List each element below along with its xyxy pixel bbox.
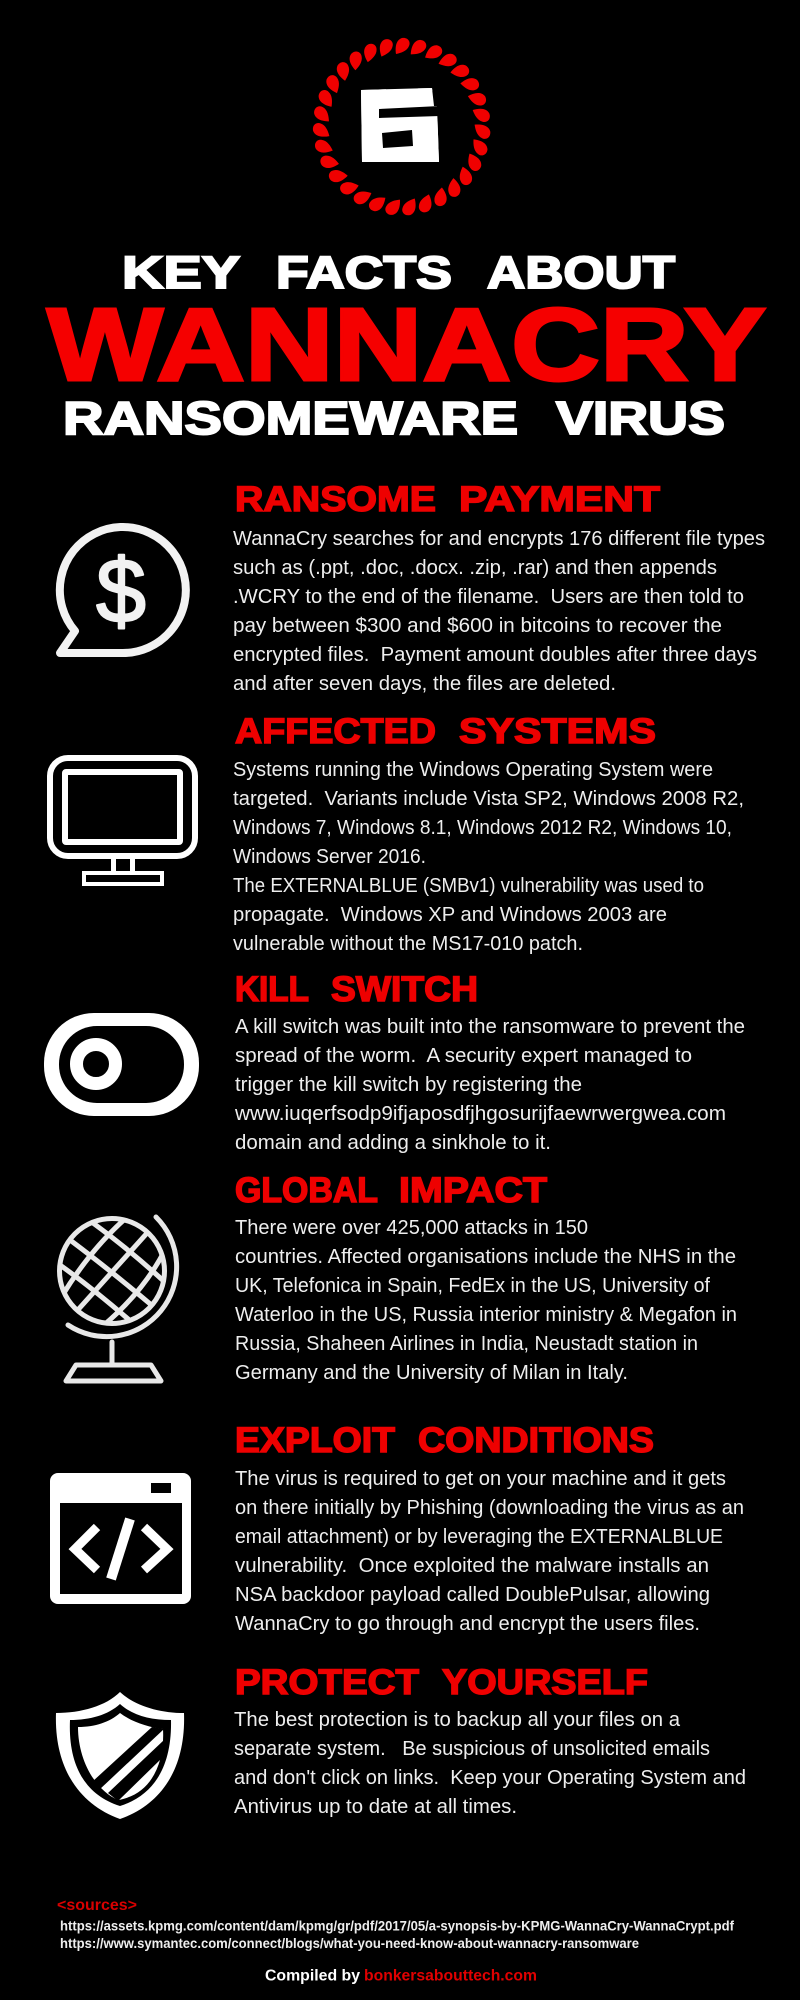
text: protect yourself body: The best protection is to backup all your files on a xyxy=(234,1709,681,1731)
text: global impact body: UK, Telefonica in Spain, FedEx in the US, University of xyxy=(235,1275,710,1297)
icon: monitor xyxy=(50,758,195,884)
text: ransome payment body xyxy=(233,528,765,695)
text: global impact body: Germany and the University of Milan in Italy. xyxy=(235,1362,628,1384)
credit line xyxy=(265,1968,537,1984)
text: ransome payment body: encrypted files. Payment amount doubles after three days xyxy=(233,644,757,666)
heading: exploit conditions: EXPLOIT xyxy=(235,1421,395,1460)
number 6: 6 xyxy=(345,17,456,240)
heading: protect yourself: PROTECT xyxy=(235,1663,419,1702)
sources xyxy=(57,1897,734,1951)
badge: number 6 in red ring xyxy=(312,38,490,216)
heading: kill switch xyxy=(235,970,478,1009)
text: ransome payment body: and after seven days, the files are deleted. xyxy=(233,673,616,695)
text: exploit conditions body: email attachment) or by leveraging the EXTERNALBLUE xyxy=(235,1526,723,1548)
heading: ransome payment: PAYMENT xyxy=(459,480,660,519)
text: exploit conditions body: NSA backdoor payload called DoublePulsar, allowing xyxy=(235,1584,710,1606)
text: protect yourself body: separate system. Be suspicious of unsolicited emails xyxy=(234,1738,710,1760)
title line: WannaCry: WANNACRY xyxy=(47,287,766,402)
icon: dollar speech bubble: $ xyxy=(96,541,146,642)
text: affected systems body: Windows Server 2016. xyxy=(233,846,426,868)
icon: desk globe xyxy=(60,1217,177,1381)
heading: kill switch: SWITCH xyxy=(331,970,478,1009)
heading: global impact: GLOBAL xyxy=(235,1171,378,1210)
heading: protect yourself: YOURSELF xyxy=(442,1663,648,1702)
panel: exploit conditions xyxy=(50,1421,744,1635)
heading: kill switch: KILL xyxy=(235,970,309,1009)
icon: toggle switch xyxy=(44,1013,199,1116)
heading: exploit conditions xyxy=(235,1421,654,1460)
text: exploit conditions body: The virus is required to get on your machine and it gets xyxy=(235,1468,726,1490)
panel: kill switch xyxy=(44,970,745,1154)
icon: code window xyxy=(50,1473,191,1604)
text: kill switch body: www.iuqerfsodp9ifjaposdfjhgosurijfaewrwergwea.com xyxy=(234,1103,726,1125)
number 6 xyxy=(361,88,439,162)
heading: affected systems: AFFECTED xyxy=(235,712,436,751)
text: affected systems body: Windows 7, Windows 8.1, Windows 2012 R2, Windows 10, xyxy=(233,817,732,839)
heading: affected systems xyxy=(235,712,656,751)
heading: protect yourself xyxy=(235,1663,648,1702)
icon: dollar speech bubble xyxy=(60,527,186,653)
title line: key facts about: ABOUT xyxy=(487,247,675,298)
text: global impact body: Waterloo in the US, Russia interior ministry & Megafon in xyxy=(235,1304,737,1326)
text: kill switch body: trigger the kill switch by registering the xyxy=(235,1074,582,1096)
text: ransome payment body: WannaCry searches for and encrypts 176 different file types xyxy=(233,528,765,550)
text: global impact body: countries. Affected organisations include the NHS in the xyxy=(235,1246,736,1268)
title line: key facts about xyxy=(122,247,675,298)
title xyxy=(47,247,766,444)
red droplet ring xyxy=(313,38,491,216)
text: protect yourself body: Antivirus up to date at all times. xyxy=(234,1796,517,1818)
heading: global impact: IMPACT xyxy=(399,1171,547,1210)
title line: ransomeware virus xyxy=(63,392,725,444)
panel: ransome payment xyxy=(60,480,765,695)
sources label: <sources> xyxy=(57,1897,137,1914)
heading: affected systems: SYSTEMS xyxy=(459,712,656,751)
heading: ransome payment: RANSOME xyxy=(235,480,436,519)
text: exploit conditions body xyxy=(235,1468,744,1635)
panel: global impact xyxy=(60,1171,737,1384)
text: affected systems body: propagate. Windows XP and Windows 2003 are xyxy=(233,904,667,926)
title line: key facts about: FACTS xyxy=(276,247,452,298)
text: exploit conditions body: WannaCry to go through and encrypt the users files. xyxy=(235,1613,700,1635)
panel: affected systems xyxy=(50,712,744,955)
text: ransome payment body: pay between $300 and $600 in bitcoins to recover the xyxy=(233,615,722,637)
panel: protect yourself xyxy=(56,1663,746,1819)
credit line: Compiled by xyxy=(265,1968,360,1984)
text: affected systems body: targeted. Variants include Vista SP2, Windows 2008 R2, xyxy=(233,788,744,810)
title line: ransomeware virus: VIRUS xyxy=(556,392,725,444)
source url 2: https://www.symantec.com/connect/blogs/what-you-need-know-about-wannacry-ransomware xyxy=(60,1936,639,1951)
text: affected systems body xyxy=(233,759,744,955)
title line: key facts about: KEY xyxy=(122,247,240,298)
text: protect yourself body: and don't click on links. Keep your Operating System and xyxy=(234,1767,746,1789)
heading: global impact xyxy=(235,1171,547,1210)
text: global impact body xyxy=(235,1217,737,1384)
text: ransome payment body: such as (.ppt, .doc, .docx. .zip, .rar) and then appends xyxy=(233,557,717,579)
text: protect yourself body xyxy=(234,1709,746,1818)
text: exploit conditions body: vulnerability. Once exploited the malware installs an xyxy=(235,1555,709,1577)
text: exploit conditions body: on there initially by Phishing (downloading the virus as an xyxy=(235,1497,744,1519)
heading: exploit conditions: CONDITIONS xyxy=(418,1421,654,1460)
text: kill switch body: spread of the worm. A security expert managed to xyxy=(235,1045,692,1067)
text: affected systems body: vulnerable without the MS17-010 patch. xyxy=(233,933,583,955)
text: affected systems body: Systems running the Windows Operating System were xyxy=(233,759,713,781)
text: global impact body: Russia, Shaheen Airlines in India, Neustadt station in xyxy=(235,1333,698,1355)
title line: ransomeware virus: RANSOMEWARE xyxy=(63,392,518,444)
source url 1: https://assets.kpmg.com/content/dam/kpmg/gr/pdf/2017/05/a-synopsis-by-KPMG-WannaCry-WannaCrypt.pdf xyxy=(60,1918,734,1934)
text: global impact body: There were over 425,000 attacks in 150 xyxy=(235,1217,588,1239)
text: affected systems body: The EXTERNALBLUE (SMBv1) vulnerability was used to xyxy=(233,875,704,897)
text: kill switch body: domain and adding a sinkhole to it. xyxy=(235,1132,551,1154)
credit line: bonkersabouttech.com xyxy=(364,1968,537,1984)
text: kill switch body: A kill switch was built into the ransomware to prevent the xyxy=(235,1016,745,1038)
heading: ransome payment xyxy=(235,480,660,519)
text: kill switch body xyxy=(234,1016,745,1154)
icon: shield xyxy=(56,1692,184,1819)
text: ransome payment body: .WCRY to the end of the filename. Users are then told to xyxy=(233,586,744,608)
